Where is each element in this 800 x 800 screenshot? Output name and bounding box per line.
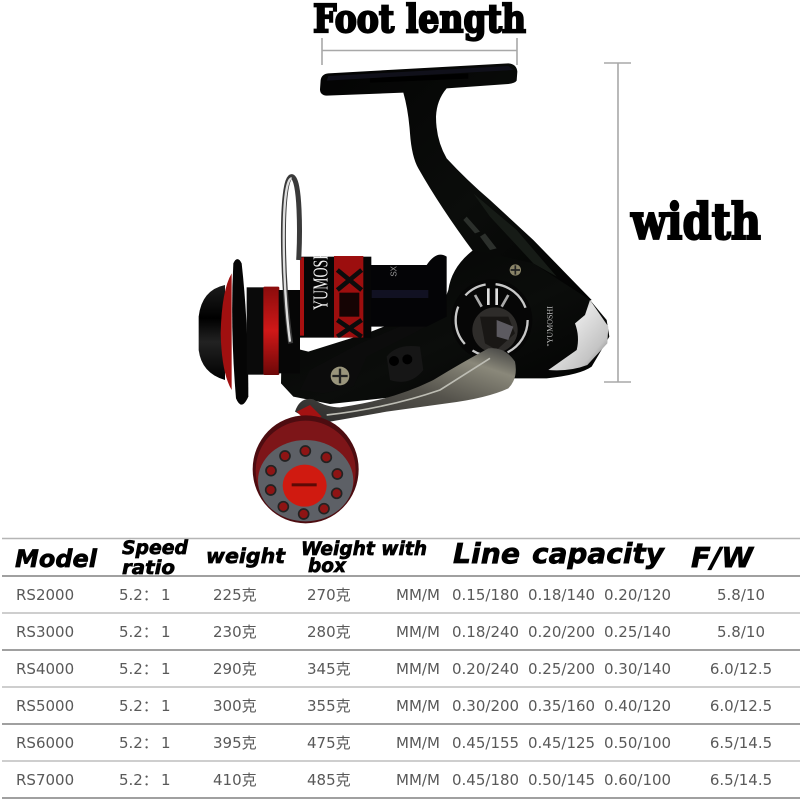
row RS7000 [16,771,772,789]
header row: capacity [532,537,666,570]
header row: box [308,556,347,577]
row RS3000: RS3000 [16,623,74,641]
row RS6000: 5.2： [119,734,158,752]
rotor arm highlight [300,297,447,393]
row RS6000: 395克 [213,734,257,752]
row RS4000: 5.2： [119,660,158,678]
row RS5000 [16,697,772,715]
header row: Weight with [301,539,427,560]
row RS4000: RS4000 [16,660,74,678]
header row: F/W [691,541,754,574]
row RS4000: 345克 [307,660,351,678]
dimension bracket: foot length [322,38,517,65]
header row: Model [15,545,98,573]
row RS4000: 0.25/200 [528,660,595,678]
bail screw [331,367,349,385]
row RS5000: 1 [161,697,171,715]
knurled red collar [263,287,279,375]
header row: Speed [122,538,189,559]
row RS2000: 270克 [307,586,351,604]
row RS5000: 0.35/160 [528,697,595,715]
spool with branding [300,256,372,338]
row RS2000: MM/M [396,586,440,604]
row RS2000: 0.18/140 [528,586,595,604]
row RS6000 [16,734,772,752]
row RS7000: 0.45/180 [452,771,519,789]
row RS6000: 0.45/125 [528,734,595,752]
row RS6000: 0.50/100 [604,734,671,752]
row RS3000: 1 [161,623,171,641]
row RS3000 [16,623,765,641]
row RS2000: 1 [161,586,171,604]
row RS5000: 6.0/12.5 [710,697,772,715]
row RS3000: 5.2： [119,623,158,641]
header row: weight [206,544,286,568]
row RS5000: 0.40/120 [604,697,671,715]
row RS7000: 1 [161,771,171,789]
knob red centre [283,465,327,507]
row RS6000: RS6000 [16,734,74,752]
gear housing emblem [451,279,532,361]
row RS3000: 0.18/240 [452,623,519,641]
reel main body [281,250,609,404]
silver nose [548,300,608,370]
row RS5000: 355克 [307,697,351,715]
row RS6000: 475克 [307,734,351,752]
row RS3000: 5.8/10 [717,623,765,641]
row RS7000: 410克 [213,771,257,789]
table: model specifications [2,537,800,798]
header row: ratio [122,558,175,579]
brand mark on body: "YUMOSHI [546,306,555,347]
handle arm [295,348,516,422]
spool flange [232,259,248,405]
spool red ring [221,273,232,390]
row RS3000: 230克 [213,623,257,641]
row RS4000: 290克 [213,660,257,678]
row RS2000: RS2000 [16,586,74,604]
row RS4000: 1 [161,660,171,678]
row RS2000 [16,586,765,604]
illustration: spinning reel [199,63,609,523]
row RS5000: 300克 [213,697,257,715]
label: width: width [630,192,761,251]
row RS7000: 485克 [307,771,351,789]
row RS5000: RS5000 [16,697,74,715]
knob holes [266,446,342,519]
row RS7000: RS7000 [16,771,74,789]
row RS3000: 280克 [307,623,351,641]
spool brand text: YUMOSHI [311,245,333,310]
row RS2000: 0.15/180 [452,586,519,604]
row RS2000: 5.2： [119,586,158,604]
row RS6000: 0.45/155 [452,734,519,752]
row RS5000: MM/M [396,697,440,715]
dimension bracket: width [604,63,631,382]
row RS7000: 5.2： [119,771,158,789]
row RS4000: 0.20/240 [452,660,519,678]
table rules [2,538,800,798]
row RS7000: 0.60/100 [604,771,671,789]
row RS3000: 0.20/200 [528,623,595,641]
row RS4000 [16,660,772,678]
row RS2000: 5.8/10 [717,586,765,604]
header row [15,537,754,579]
row RS3000: MM/M [396,623,440,641]
row RS7000: 6.5/14.5 [710,771,772,789]
knob stem [297,405,322,423]
handle knob [253,415,359,523]
dark collar behind bail [279,290,300,373]
row RS4000: MM/M [396,660,440,678]
body side window [387,346,423,382]
upper screw [510,264,521,276]
row RS3000: 0.25/140 [604,623,671,641]
row RS2000: 0.20/120 [604,586,671,604]
spool small text: SX [390,265,399,277]
row RS4000: 6.0/12.5 [710,660,772,678]
row RS7000: MM/M [396,771,440,789]
spool front cap [199,285,225,380]
row RS5000: 5.2： [119,697,158,715]
handle highlight [327,358,490,415]
row RS6000: MM/M [396,734,440,752]
spool neck [247,287,265,375]
reel foot and arm [320,63,592,317]
row RS7000: 0.50/145 [528,771,595,789]
row RS6000: 6.5/14.5 [710,734,772,752]
header row: Line [453,537,520,570]
row RS6000: 1 [161,734,171,752]
window holes [389,354,412,366]
row RS2000: 225克 [213,586,257,604]
bail wire [283,177,299,343]
row RS5000: 0.30/200 [452,697,519,715]
row RS4000: 0.30/140 [604,660,671,678]
spool cylinder [370,255,447,327]
